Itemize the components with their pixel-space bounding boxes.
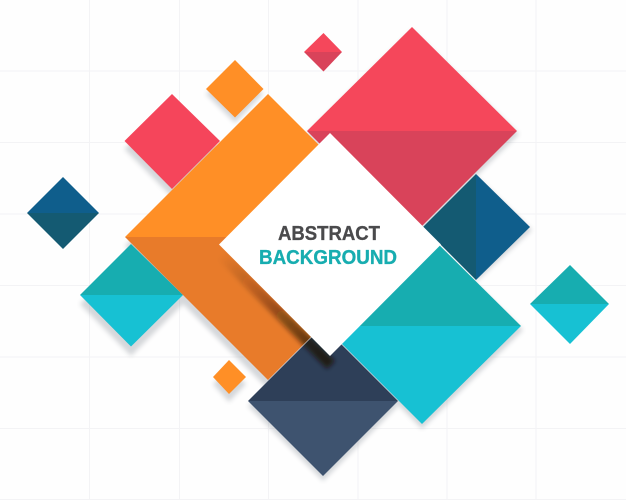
diamond: teal left xyxy=(80,244,183,346)
diamond: pink left xyxy=(124,94,220,189)
diamond: large teal xyxy=(324,228,521,424)
diamond: large pink xyxy=(307,27,517,236)
diamond: small orange bottom xyxy=(213,360,246,394)
diamond: small pink xyxy=(304,33,342,72)
diamond: blue left xyxy=(27,177,99,249)
panel: white title diamond xyxy=(219,133,441,356)
title: abstract: ABSTRACT xyxy=(278,222,380,245)
diamond: blue right xyxy=(423,174,530,280)
shadow: white diamond on orange and navy xyxy=(225,258,336,370)
diamond: navy xyxy=(248,326,398,476)
diamond: teal right xyxy=(530,265,609,344)
soft shadows behind shapes xyxy=(80,30,532,481)
band: orange xyxy=(125,94,411,380)
title: background: BACKGROUND xyxy=(259,246,397,269)
diamond: small orange top xyxy=(206,60,264,118)
